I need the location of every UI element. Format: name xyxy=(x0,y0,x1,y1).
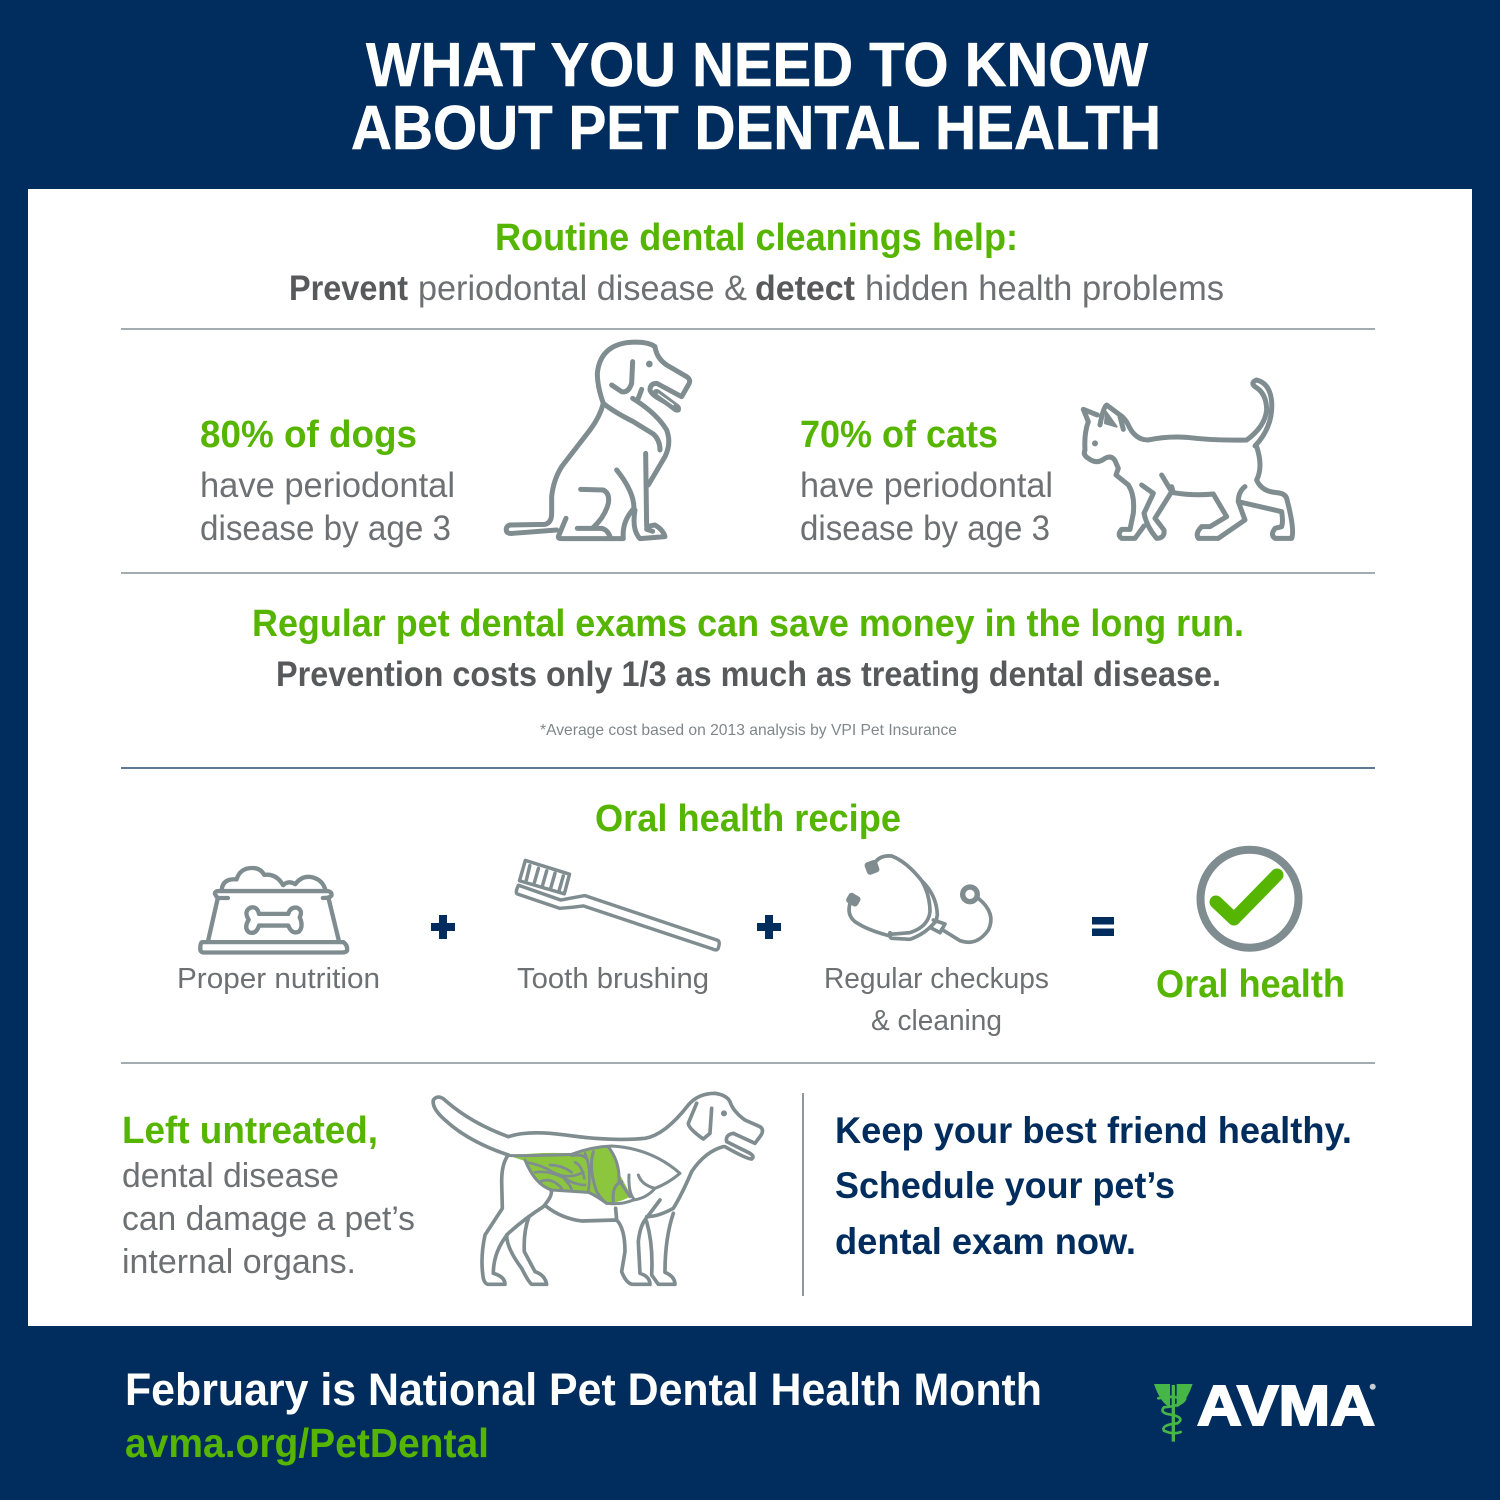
section: routine cleanings xyxy=(289,217,1224,308)
footer text: avma.org/PetDental xyxy=(125,1420,489,1466)
text: prevent and detect: periodontal disease & xyxy=(418,269,747,308)
label: oral health: Oral health xyxy=(1156,963,1345,1006)
labels: recipe items: Proper nutrition xyxy=(177,963,380,995)
title xyxy=(351,31,1161,163)
section: save money: Regular pet dental exams can save money in the long run. xyxy=(252,603,1244,645)
icon: equals xyxy=(1092,917,1114,936)
white content panel xyxy=(28,189,1472,1326)
text: left untreated: dental disease xyxy=(122,1157,339,1195)
call to action: Keep your best friend healthy. xyxy=(835,1110,1352,1151)
logo: AVMA xyxy=(1154,1374,1376,1442)
icon: check mark xyxy=(1200,850,1298,948)
logo wordmark: AVMA xyxy=(1197,1374,1375,1438)
organs xyxy=(508,1147,631,1204)
heading: routine dental cleanings: Routine dental cleanings help: xyxy=(495,217,1018,259)
icon: plus xyxy=(757,915,781,939)
stat: dogs: 80% of dogs xyxy=(200,414,417,456)
text: left untreated: can damage a pet’s xyxy=(122,1200,415,1238)
call to action xyxy=(835,1110,1352,1262)
call to action: Schedule your pet’s xyxy=(835,1165,1175,1206)
stat: cats: 70% of cats xyxy=(800,414,998,456)
stat: cats xyxy=(800,414,1053,548)
footer text xyxy=(125,1364,1042,1466)
labels: recipe items xyxy=(177,963,1049,1037)
icon: toothbrush xyxy=(516,860,719,950)
footnote: *Average cost based on 2013 analysis by VPI Pet Insurance xyxy=(540,722,957,739)
text: prevention cost: Prevention costs only 1/3 as much as treating dental disease. xyxy=(276,655,1221,694)
labels: recipe items: Regular checkups xyxy=(824,963,1049,995)
stat: dogs xyxy=(200,414,455,548)
stat: cats: have periodontal xyxy=(800,466,1053,505)
footer text: February is National Pet Dental Health Month xyxy=(125,1364,1042,1415)
icon: food bowl xyxy=(200,868,347,952)
icon: walking cat xyxy=(1083,380,1293,538)
stat: dogs: have periodontal xyxy=(200,466,455,505)
call to action: dental exam now. xyxy=(835,1221,1136,1262)
text: prevent and detect: Prevent xyxy=(289,269,408,308)
icon: dog with internal organs xyxy=(433,1093,762,1284)
labels: recipe items: & cleaning xyxy=(871,1005,1002,1037)
stat: cats: disease by age 3 xyxy=(800,509,1050,548)
text: left untreated: Left untreated, xyxy=(122,1110,378,1152)
logo mark xyxy=(1154,1384,1193,1442)
icon: sitting dog xyxy=(506,342,690,539)
text: left untreated xyxy=(122,1110,415,1281)
stat: dogs: disease by age 3 xyxy=(200,509,451,548)
title: WHAT YOU NEED TO KNOW xyxy=(366,31,1148,100)
labels: recipe items: Tooth brushing xyxy=(517,963,709,995)
text: prevent and detect xyxy=(289,269,1224,308)
title: ABOUT PET DENTAL HEALTH xyxy=(351,94,1161,163)
text: prevent and detect: detect xyxy=(755,269,855,308)
text: left untreated: internal organs. xyxy=(122,1243,356,1281)
icon: stethoscope xyxy=(847,856,991,942)
heading: oral health recipe: Oral health recipe xyxy=(595,798,901,840)
icon: plus xyxy=(431,915,455,939)
text: prevent and detect: hidden health problems xyxy=(865,269,1224,308)
section: save money xyxy=(252,603,1244,739)
